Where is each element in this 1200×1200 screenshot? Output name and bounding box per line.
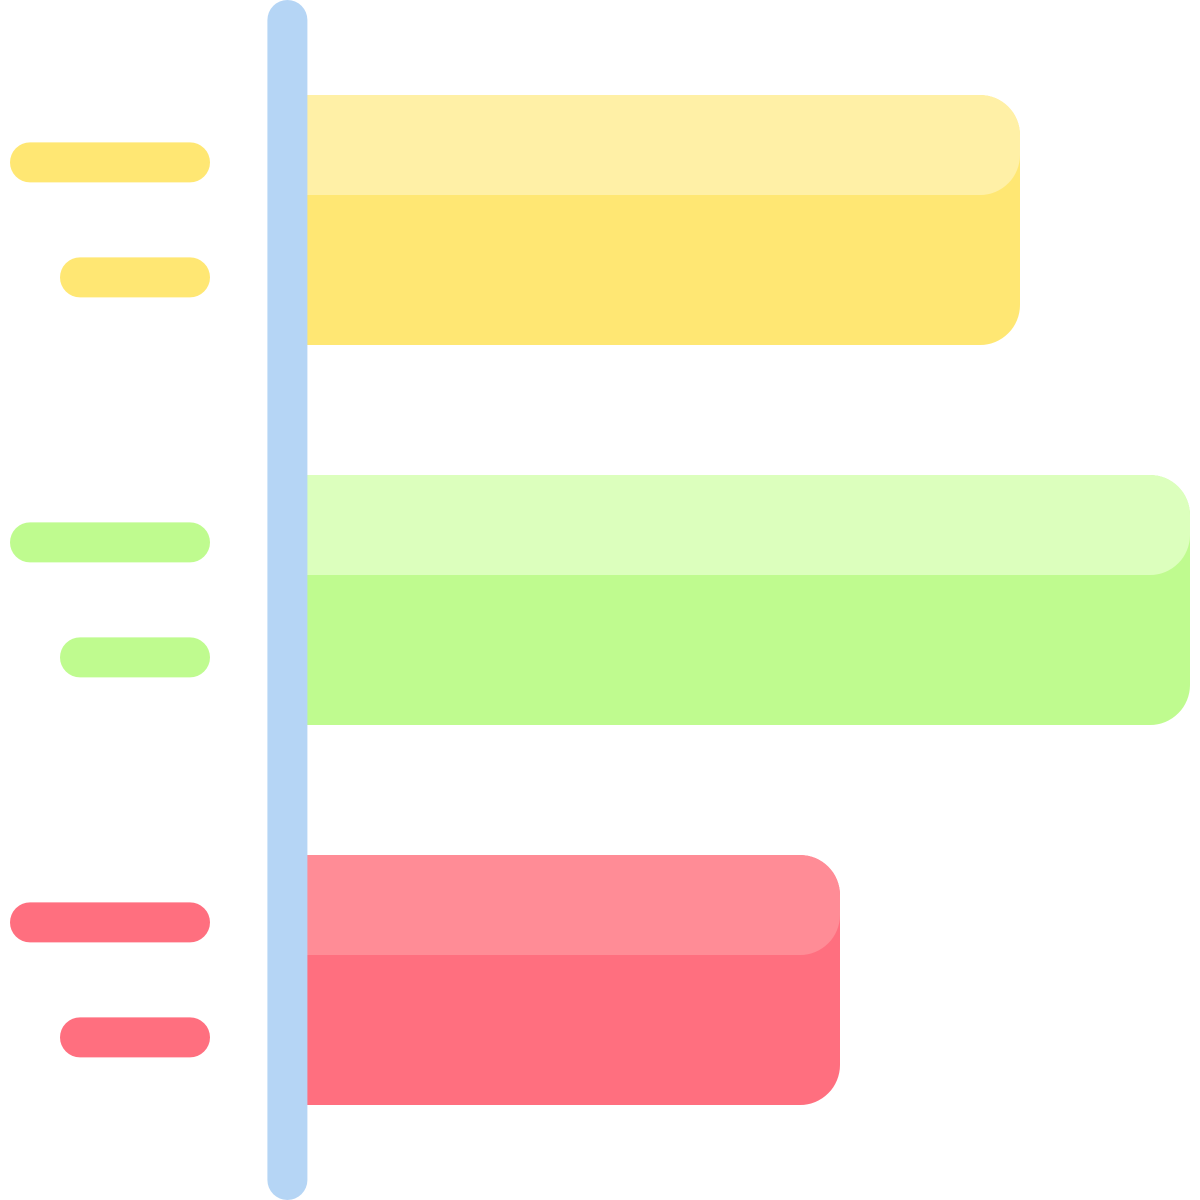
vertical axis bbox=[267, 0, 307, 1200]
yellow bar bbox=[307, 95, 1020, 345]
red bar bbox=[307, 855, 840, 1105]
green label lines bbox=[10, 522, 210, 677]
green bar bbox=[307, 475, 1190, 725]
red label lines bbox=[10, 902, 210, 1057]
yellow label lines bbox=[10, 142, 210, 297]
